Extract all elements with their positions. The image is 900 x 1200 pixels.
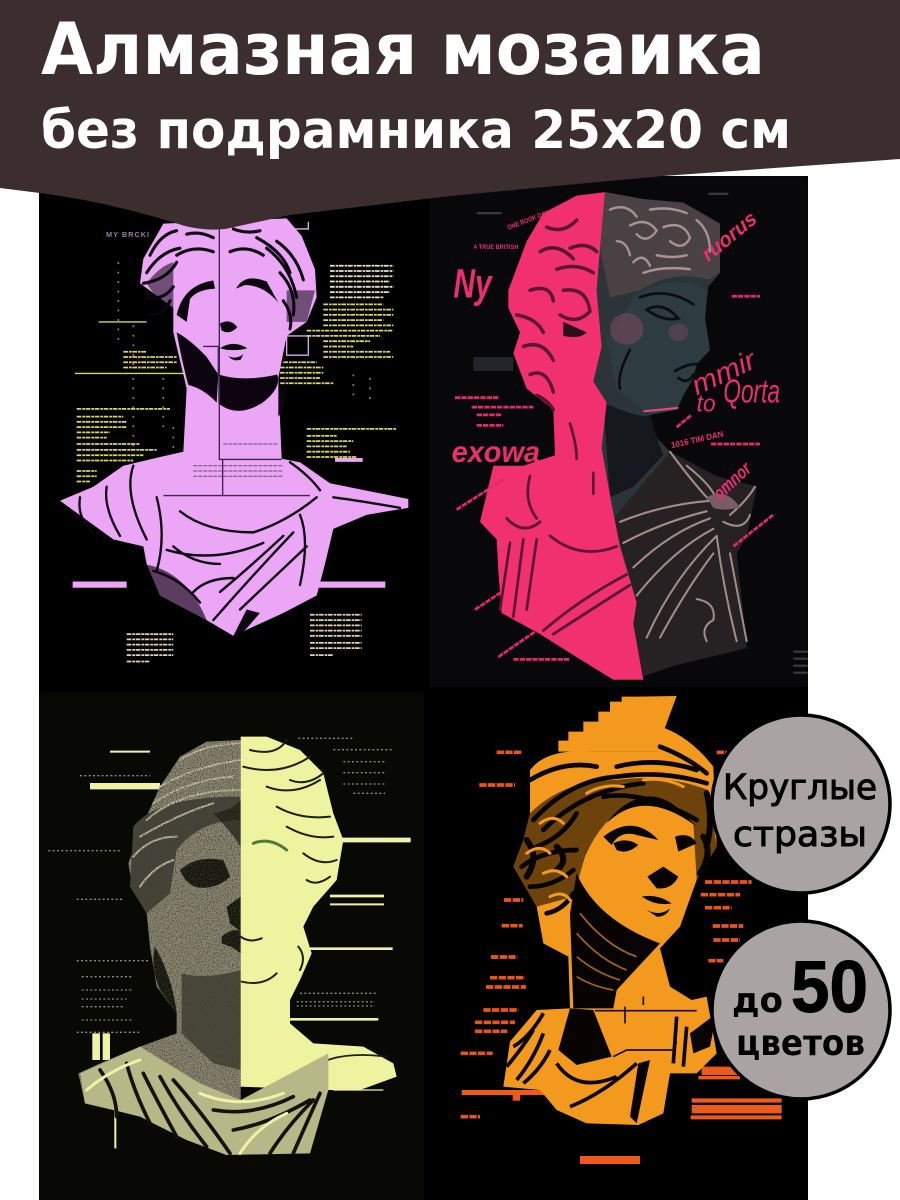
pink shadows — [500, 220, 630, 634]
speckled lower shadow — [143, 564, 207, 620]
grey hair — [600, 192, 720, 297]
badge: round rhinestones: Круглые — [723, 768, 877, 808]
grey drapery — [613, 452, 757, 676]
panel: pink and grey split bust — [430, 176, 808, 688]
pink scribbled notes: Ny — [453, 261, 493, 307]
stepped glitch top — [558, 696, 677, 752]
bust silhouette — [60, 218, 408, 636]
badge: round rhinestones: стразы — [733, 815, 867, 855]
speckles — [118, 262, 370, 455]
grey half — [593, 192, 757, 676]
badge: up to 50 colours: до — [732, 981, 783, 1021]
yellow rules — [75, 322, 220, 373]
bust shadows — [147, 262, 315, 636]
heading: my brick: MY BRCKI — [106, 230, 150, 239]
face details — [558, 796, 717, 1123]
bust silhouette — [503, 727, 717, 1125]
pink scribbled notes: exowa — [452, 437, 540, 469]
hair highlights — [133, 743, 240, 887]
orange bars — [462, 1067, 782, 1164]
bars — [73, 458, 385, 588]
badge: up to 50 colours: цветов — [736, 1023, 865, 1064]
pink scribbled notes: to — [697, 390, 716, 416]
pink scribbled notes: ruorus — [698, 207, 761, 266]
panel: pale yellow split bust — [39, 693, 424, 1200]
grey face — [607, 282, 710, 415]
subtitle: без подрамника 25х20 см — [41, 100, 791, 161]
drapery — [80, 1047, 328, 1155]
pale hair strokes — [241, 740, 387, 1070]
construction lines — [163, 227, 310, 496]
pink scribbled notes: 1016 TIM DAN — [670, 429, 724, 450]
hair shading — [130, 797, 240, 913]
panel: orange bust — [424, 687, 808, 1200]
yellow text blocks — [77, 266, 397, 661]
drapery strokes — [507, 1013, 687, 1107]
pink scribbled notes — [452, 207, 780, 504]
badge: round rhinestones — [712, 715, 890, 893]
orange curls — [527, 779, 683, 900]
pink scribbled notes: omnor — [709, 456, 756, 504]
pink scribbled notes: A TRUE BRITISH — [473, 244, 519, 251]
pink scribbled notes: ONE BOOK DAY — [507, 209, 550, 232]
badge: up to 50 colours — [712, 921, 890, 1099]
grey half — [78, 740, 241, 1155]
orange labels — [461, 752, 752, 1117]
hair shadows — [522, 747, 710, 913]
pale half — [241, 737, 397, 1090]
panel: pink bust — [39, 177, 450, 700]
header banner — [0, 0, 900, 230]
pink scribbled notes: mmir — [687, 343, 762, 401]
neck shading — [182, 970, 241, 1070]
hair dark mass — [513, 778, 717, 907]
grey knot — [707, 494, 740, 510]
badge: up to 50 colours: 50 — [791, 947, 868, 1028]
face shadows — [153, 800, 241, 1013]
glitch bars — [90, 751, 411, 1148]
grain overlay — [78, 740, 241, 1155]
small notes — [48, 738, 392, 1032]
neck streaks — [577, 913, 637, 990]
title: Алмазная мозаика — [41, 7, 765, 91]
hair and drapery lines — [79, 229, 400, 620]
pink scribbled notes: Qorta — [723, 373, 780, 410]
pink half — [480, 192, 643, 680]
